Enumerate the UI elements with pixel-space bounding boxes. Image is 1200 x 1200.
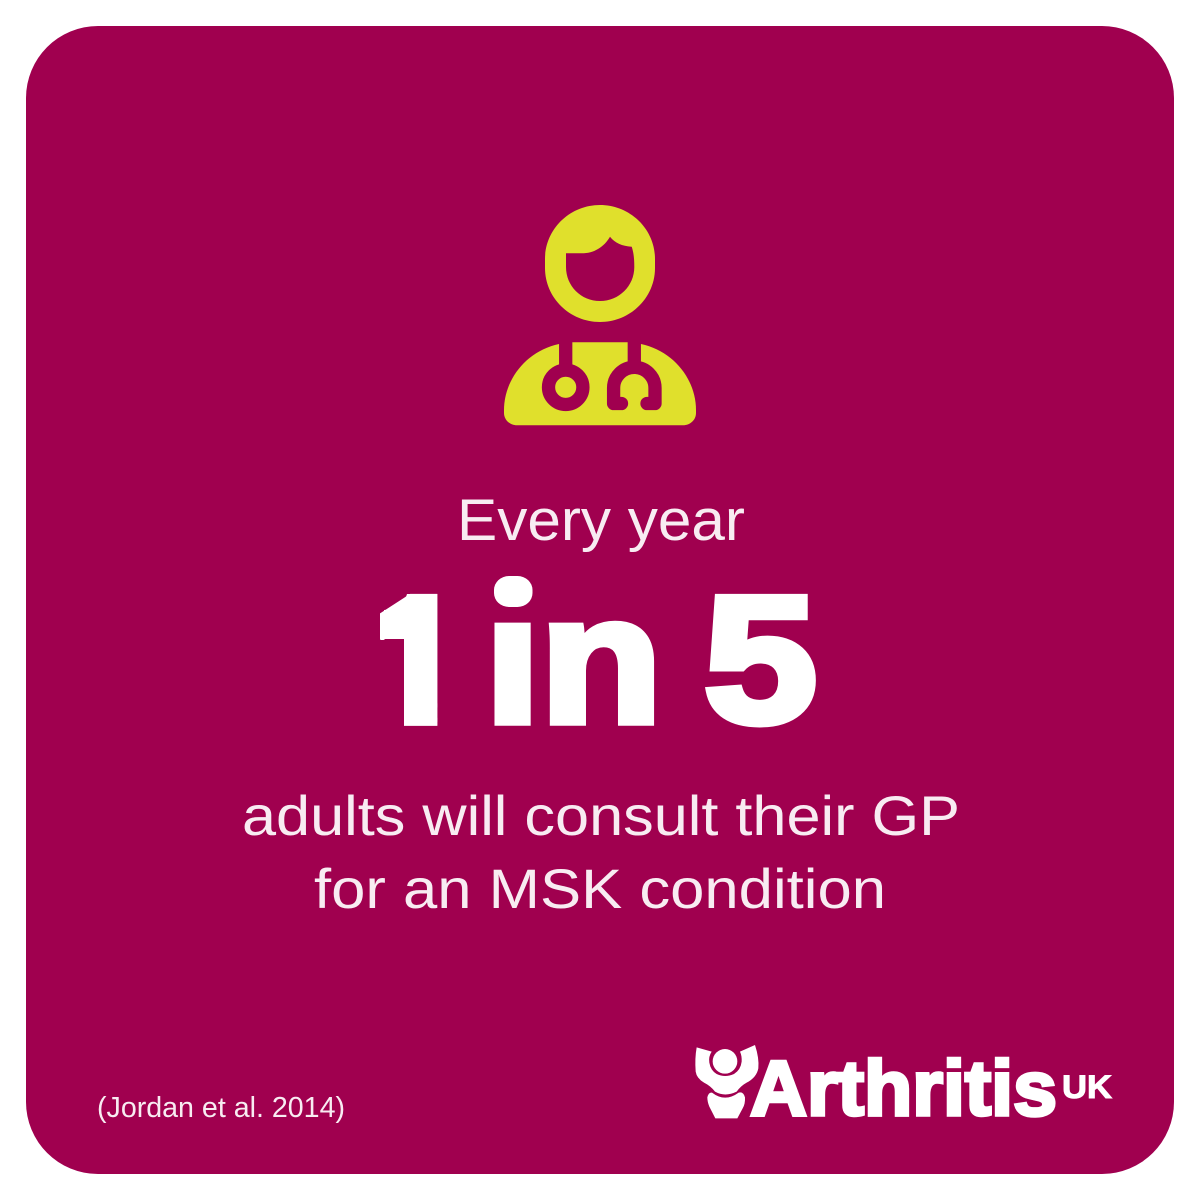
logo suffix: UK	[1062, 1069, 1112, 1105]
text: every year: Every year	[457, 488, 745, 553]
text: second line: for an MSK condition	[314, 857, 886, 920]
numeral five: 5	[704, 560, 817, 761]
stem and flag of the numeral one	[384, 594, 437, 726]
icon: doctor head	[545, 205, 655, 322]
headline statistic: 1 in 5	[380, 576, 816, 728]
logo icon: raised arms figure	[695, 1045, 759, 1118]
text: first line: adults will consult their GP	[242, 784, 960, 847]
icon: doctor with stethoscope	[504, 205, 696, 425]
dot of the letter i	[494, 576, 532, 607]
icon: stethoscope right tube	[614, 336, 655, 404]
logo wordmark: Arthritis	[750, 1044, 1057, 1132]
word: in: in	[485, 560, 662, 761]
citation: (Jordan et al. 2014)	[97, 1092, 345, 1124]
text block: description	[242, 784, 960, 920]
icon: stethoscope left tube	[548, 338, 583, 404]
numeral one: 1	[368, 560, 468, 761]
icon: doctor body	[504, 342, 696, 425]
logo: Arthritis UK	[695, 1044, 1112, 1132]
